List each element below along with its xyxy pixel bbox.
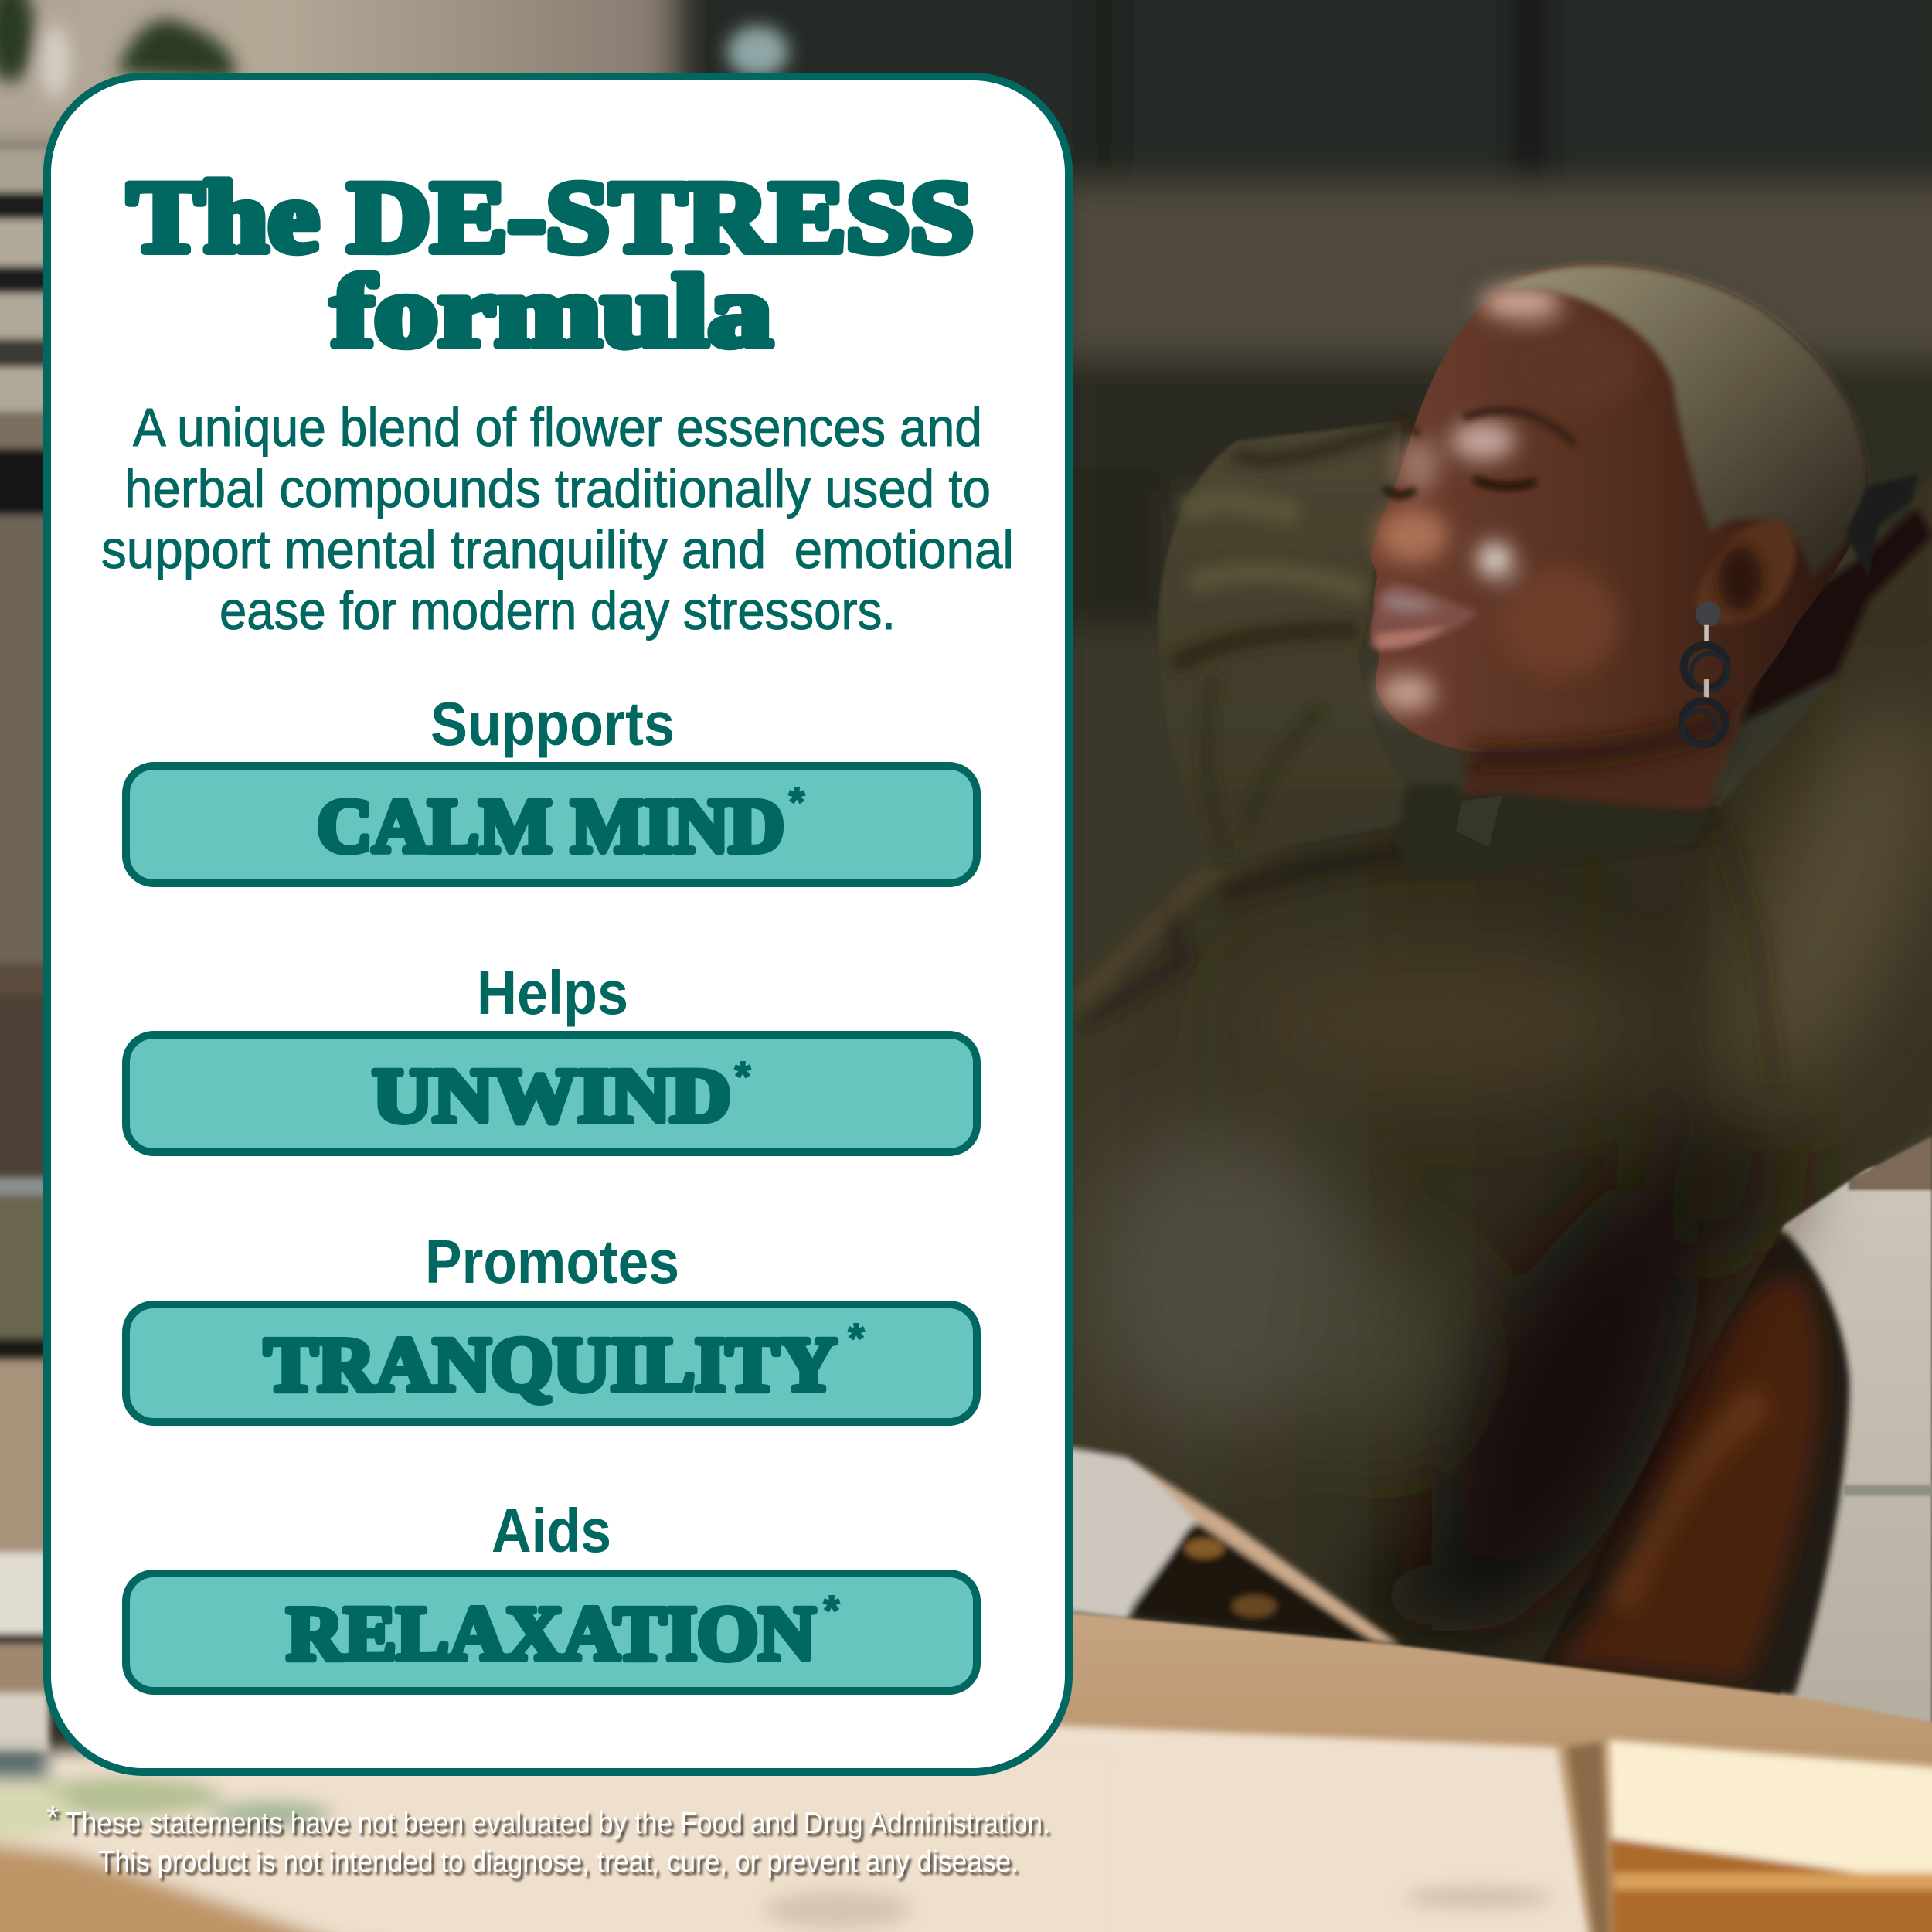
title: The DE-STRESS — [128, 160, 974, 274]
benefit: unwind: UNWIND — [372, 1053, 731, 1138]
shirt seams — [1074, 819, 1774, 1084]
benefit: unwind: Helps — [477, 958, 628, 1027]
head and neck — [1370, 263, 1932, 877]
hair — [1499, 265, 1868, 579]
benefit: calm mind — [126, 689, 977, 883]
description text block: ease for modern day stressors. — [219, 580, 896, 641]
title — [128, 160, 974, 368]
benefit: relaxation: Aids — [492, 1496, 611, 1565]
description text block: herbal compounds traditionally used to — [124, 458, 991, 519]
wall and cabinet at right — [1781, 1136, 1932, 1750]
benefit: tranquility: Promotes — [425, 1227, 679, 1296]
left edge of the blurred shelves — [0, 148, 49, 1754]
wrist watch — [1846, 474, 1917, 579]
back of neck and hand — [1740, 509, 1932, 723]
description text block: support mental tranquility and emotional — [101, 519, 1014, 580]
benefit: relaxation — [126, 1496, 977, 1691]
background wall and office — [0, 0, 1932, 1232]
benefit: unwind: * — [734, 1053, 751, 1100]
blurred papers and notebooks — [369, 1725, 1932, 1932]
raised left arm — [1158, 422, 1413, 869]
benefit: relaxation: RELAXATION — [287, 1590, 815, 1676]
ear — [1695, 519, 1796, 624]
office chair — [1536, 1231, 1849, 1696]
blurred lamp and plant — [0, 0, 788, 99]
desk surface — [1047, 1611, 1932, 1932]
benefit: calm mind: Supports — [430, 689, 675, 758]
collar — [1396, 782, 1716, 877]
shirt folds and shading — [1084, 678, 1932, 1658]
panel: de-stress formula card — [47, 77, 1069, 1772]
disclaimer text — [46, 1799, 1050, 1879]
benefit: tranquility: TRANQUILITY — [264, 1321, 837, 1407]
book on lap — [1064, 1446, 1400, 1645]
benefit: calm mind: CALM MIND — [317, 783, 784, 869]
description text block — [101, 397, 1014, 641]
face highlights — [1377, 286, 1640, 711]
disclaimer text: These statements have not been evaluated by the Food and Drug Administration. — [65, 1807, 1050, 1840]
blurred desk foreground under the card — [0, 1750, 1553, 1932]
closed eyes and brows — [1386, 410, 1573, 495]
disclaimer text: This product is not intended to diagnose, treat, cure, or prevent any disease. — [98, 1845, 1019, 1879]
benefit: unwind — [126, 958, 977, 1152]
disclaimer text: * — [46, 1799, 59, 1835]
benefit: relaxation: * — [823, 1587, 840, 1634]
under-jaw shadow — [1472, 719, 1727, 756]
shirt body — [1060, 462, 1932, 1661]
neck — [1461, 644, 1776, 812]
title: formula — [332, 254, 772, 368]
benefit: calm mind: * — [788, 779, 805, 825]
description text block: A unique blend of flower essences and — [133, 397, 982, 457]
benefit: tranquility — [126, 1227, 977, 1422]
face — [1371, 263, 1868, 753]
lips — [1370, 583, 1478, 650]
earring — [1682, 602, 1728, 745]
benefit: tranquility: * — [848, 1315, 865, 1362]
